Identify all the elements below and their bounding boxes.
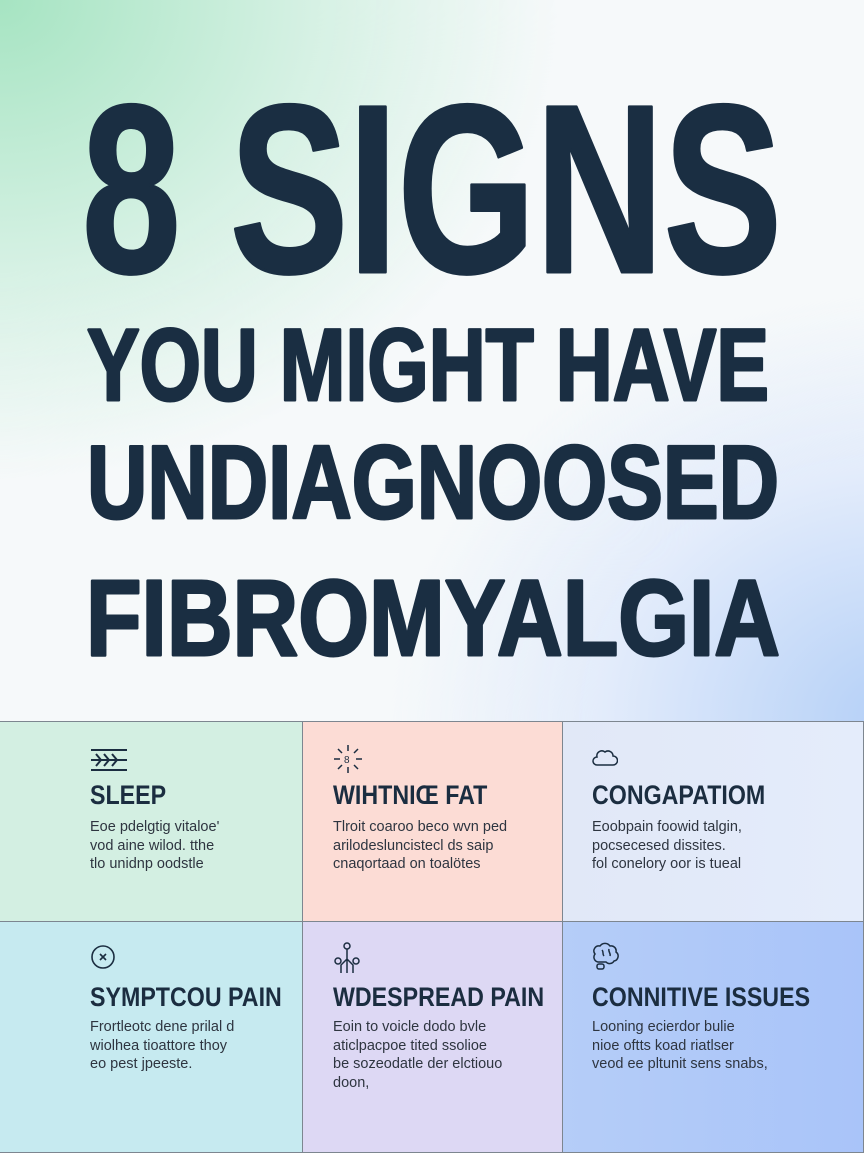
text	[592, 1019, 768, 1072]
heading: WIHTNIŒ FAT	[333, 780, 487, 810]
text	[333, 819, 507, 872]
text	[90, 1019, 234, 1072]
text: fol conelory oor is tueal	[592, 856, 741, 872]
heading: SYMPTCOU PAIN	[90, 982, 282, 1012]
text: Eoobpain foowid talgin,	[592, 819, 742, 835]
text: veod ee pltunit sens snabs,	[592, 1056, 768, 1072]
icon: brain	[593, 942, 619, 970]
icon: burst	[334, 745, 362, 773]
panel: sleep	[0, 722, 303, 922]
heading: WDESPREAD PAIN	[333, 982, 544, 1012]
panel: symptom pain	[0, 922, 303, 1153]
text: nioe oftts koad riatlser	[592, 1038, 734, 1054]
text: tlo unidnp oodstle	[90, 856, 204, 872]
panel: widespread pain	[303, 922, 563, 1153]
text	[592, 819, 742, 872]
text: cnaqortaad on toalötes	[333, 856, 481, 872]
text: pocsecesed dissites.	[592, 838, 726, 854]
icon: circle x	[91, 945, 115, 969]
text: doon,	[333, 1074, 369, 1090]
icon: cloud	[592, 750, 618, 766]
text: Eoin to voicle dodo bvle	[333, 1019, 486, 1035]
text: Frortleotc dene prilal d	[90, 1019, 234, 1035]
heading: CONNITIVE ISSUES	[592, 982, 810, 1012]
text: arilodesluncistecl ds saip	[333, 838, 493, 854]
text: Looning ecierdor bulie	[592, 1019, 735, 1035]
text	[333, 1019, 502, 1090]
heading: SLEEP	[90, 780, 166, 810]
icon: nerves	[334, 942, 360, 973]
text: aticlpacpoe tited ssolioe	[333, 1038, 487, 1054]
text: Eoe pdelgtig vitaloe'	[90, 819, 219, 835]
panel: concentration	[563, 722, 864, 922]
text: vod aine wilod. tthe	[90, 838, 214, 854]
text: be sozeodatle der elctiouo	[333, 1056, 502, 1072]
panel: cognitive issues	[563, 922, 864, 1153]
grid of signs	[0, 721, 864, 1153]
heading: CONGAPATIOM	[592, 780, 765, 810]
icon: burst: 8	[344, 755, 350, 766]
panel: fatigue	[303, 722, 563, 922]
icon: sleep lines	[91, 749, 127, 771]
text	[90, 819, 219, 872]
text: wiolhea tioattore thoy	[90, 1038, 227, 1054]
text: Tlroit coaroo beco wvn ped	[333, 819, 507, 835]
text: eo pest jpeeste.	[90, 1056, 192, 1072]
title	[82, 55, 782, 678]
